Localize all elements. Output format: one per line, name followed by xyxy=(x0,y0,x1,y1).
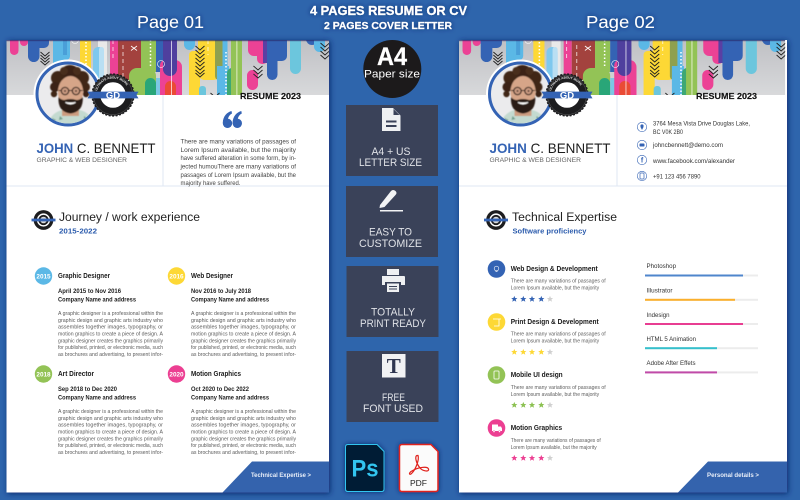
logo badge xyxy=(542,73,592,117)
job: motion graphics 2020: graphic design and graphic arts industry who xyxy=(191,416,296,422)
job: web designer 2016: as brochures and advertising, to present infor- xyxy=(191,352,296,358)
footer tab: next page: Technical Expertise > xyxy=(251,473,311,479)
feature: free font used: FREE xyxy=(382,392,405,404)
contact: facebook xyxy=(637,155,735,165)
job: web designer 2016: Nov 2016 to July 2018 xyxy=(191,288,251,295)
job: web designer 2016: A graphic designer is a professional within the xyxy=(191,311,296,317)
icon: photoshop xyxy=(346,444,384,492)
job: art director 2018: assembles together images, typography, or xyxy=(58,423,163,429)
feature: A4 + US letter size: A4 + US xyxy=(372,146,410,158)
job: graphic designer 2015: motion graphics to create a piece of design. A xyxy=(58,332,163,338)
job: art director 2018 xyxy=(35,365,163,456)
section date range: 2015-2022 xyxy=(59,226,97,236)
feature: easy to customize: CUSTOMIZE xyxy=(359,238,422,250)
bar: html 5 animation: HTML 5 Animation xyxy=(646,336,697,343)
skill: print design: Lorem Ipsum available, but the majority xyxy=(511,338,600,344)
skill: print design: Print Design & Development xyxy=(511,317,599,326)
summary paragraph: have suffered alteration in some form, by in- xyxy=(180,155,296,162)
job: graphic designer 2015: as brochures and advertising, to present infor- xyxy=(58,352,163,358)
contact list xyxy=(637,122,750,181)
job: art director 2018: Art Director xyxy=(58,369,94,378)
job: web designer 2016 xyxy=(168,267,296,358)
job: graphic designer 2015: Graphic Designer xyxy=(58,271,110,280)
title xyxy=(310,4,468,32)
logo badge: ULTIMATE ABOUT WORK xyxy=(549,76,582,90)
job: motion graphics 2020 xyxy=(168,365,296,456)
bar: after effects: Adobe After Effets xyxy=(646,360,696,367)
summary paragraph: There are many variations of passages of xyxy=(180,138,296,146)
job: graphic designer 2015: assembles together images, typography, or xyxy=(58,325,163,331)
panel: page 02 resume xyxy=(456,37,792,498)
contact: phone: +91 123 456 7890 xyxy=(653,174,701,180)
icon: printer xyxy=(382,269,405,292)
job: art director 2018: A graphic designer is a professional within the xyxy=(58,409,163,415)
feature: free font used xyxy=(346,351,438,422)
section heading: Technical Expertise xyxy=(512,212,617,224)
header dividers xyxy=(459,95,787,186)
icon: pencil xyxy=(380,190,403,212)
job: web designer 2016: Company Name and address xyxy=(191,296,269,304)
job: motion graphics 2020: 2020 xyxy=(169,371,184,378)
contact: facebook: f xyxy=(641,158,644,164)
skill: motion graphics: Lorem Ipsum available, but the majority xyxy=(511,445,597,451)
section subheading: Software proficiency xyxy=(512,226,587,236)
icon: pdf xyxy=(400,444,438,492)
icon: document xyxy=(382,108,400,131)
logo badge: GD xyxy=(106,90,120,102)
badge: A4 paper size: Paper size xyxy=(364,68,420,80)
title: 2 PAGES COVER LETTER xyxy=(324,20,452,32)
header dividers xyxy=(6,95,329,186)
summary paragraph xyxy=(180,138,297,187)
skill: mobile ui: Mobile UI design xyxy=(511,370,563,379)
job: motion graphics 2020: for published, printed, or electronic media, such xyxy=(191,443,296,449)
summary paragraph: Lorem Ipsum available, but the majority xyxy=(180,147,297,154)
footer tab: next page xyxy=(222,462,329,492)
job: graphic designer 2015: April 2015 to Nov 2016 xyxy=(58,288,121,295)
name: JOHN C. BENNETT xyxy=(490,140,611,156)
feature: A4 + US letter size xyxy=(346,105,438,176)
icon: pdf: PDF xyxy=(410,478,427,488)
job: web designer 2016: graphic designer creates the graphics primarily xyxy=(191,338,296,344)
feature: easy to customize xyxy=(346,186,438,257)
job: graphic designer 2015: Company Name and address xyxy=(58,296,136,304)
skill: motion graphics xyxy=(488,419,601,461)
bar chart: software skills xyxy=(645,263,758,373)
job: motion graphics 2020: assembles together images, typography, or xyxy=(191,423,296,429)
job title: GRAPHIC & WEB DESIGNER xyxy=(490,157,581,164)
job: motion graphics 2020: motion graphics to create a piece of design. A xyxy=(191,430,296,436)
skill: mobile ui: There are many variations of passages of xyxy=(511,385,606,391)
resume label: RESUME 2023 xyxy=(696,91,757,101)
job: art director 2018: graphic designer creates the graphics primarily xyxy=(58,436,163,442)
job: web designer 2016: graphic design and graphic arts industry who xyxy=(191,318,296,324)
job: motion graphics 2020: Oct 2020 to Dec 2022 xyxy=(191,386,249,393)
job: motion graphics 2020: as brochures and advertising, to present infor- xyxy=(191,450,296,456)
contact: address xyxy=(637,122,750,136)
heading: page 02: Page 02 xyxy=(586,12,655,32)
feature: totally print ready: TOTALLY xyxy=(371,307,416,319)
job: graphic designer 2015 xyxy=(35,267,163,358)
job: motion graphics 2020: Company Name and address xyxy=(191,394,269,402)
skill: print design: There are many variations of passages of xyxy=(511,332,606,338)
icon: font T: T xyxy=(387,354,401,378)
job: art director 2018: Sep 2018 to Dec 2020 xyxy=(58,386,117,393)
section heading: Journey / work experience xyxy=(59,212,200,224)
badge: A4 paper size xyxy=(363,40,421,98)
skill: web design: Web Design & Development xyxy=(511,264,598,273)
title: 4 PAGES RESUME OR CV xyxy=(310,4,468,18)
skill: motion graphics: Motion Graphics xyxy=(511,423,562,432)
job: motion graphics 2020: A graphic designer is a professional within the xyxy=(191,409,296,415)
skill: mobile ui: Lorem Ipsum available, but the majority xyxy=(511,392,600,398)
summary paragraph: jected humouThere are many variations of xyxy=(180,164,296,170)
job: motion graphics 2020: graphic designer creates the graphics primarily xyxy=(191,436,296,442)
skill: web design xyxy=(488,260,606,302)
resume label: RESUME 2023 xyxy=(240,91,301,101)
bar: indesign: Indesign xyxy=(646,312,670,319)
job: web designer 2016: 2016 xyxy=(169,273,184,280)
skill: mobile ui xyxy=(488,366,606,408)
footer tab: next page xyxy=(678,462,787,492)
footer tab: next page: Personal details > xyxy=(707,473,759,479)
section logo xyxy=(32,210,55,230)
job: graphic designer 2015: A graphic designer is a professional within the xyxy=(58,311,163,317)
summary paragraph: passages of Lorem Ipsum available, but the xyxy=(180,172,296,179)
logo badge: GD xyxy=(560,90,574,102)
logo badge xyxy=(88,73,138,117)
job: art director 2018: 2018 xyxy=(36,371,51,378)
job: art director 2018: Company Name and address xyxy=(58,394,136,402)
job: web designer 2016: motion graphics to create a piece of design. A xyxy=(191,332,296,338)
badge: A4 paper size: A4 xyxy=(377,43,407,71)
logo badge: ULTIMATE ABOUT WORK xyxy=(95,76,128,90)
job: graphic designer 2015: 2015 xyxy=(36,273,51,280)
job: web designer 2016: assembles together images, typography, or xyxy=(191,325,296,331)
job: motion graphics 2020: Motion Graphics xyxy=(191,369,241,378)
panel: page 01 resume xyxy=(4,37,334,498)
feature: free font used: FONT USED xyxy=(363,403,423,415)
feature: A4 + US letter size: LETTER SIZE xyxy=(359,157,422,169)
skill: web design: There are many variations of passages of xyxy=(511,278,606,284)
icon: photoshop: Ps xyxy=(352,456,378,482)
icon: quotation mark xyxy=(223,111,242,128)
bar: illustrator: Illustrator xyxy=(646,288,672,294)
job: art director 2018: motion graphics to create a piece of design. A xyxy=(58,430,163,436)
job title: GRAPHIC & WEB DESIGNER xyxy=(36,157,127,164)
header banner xyxy=(6,40,329,95)
feature: easy to customize: EASY TO xyxy=(369,227,412,239)
contact: email: johncbennett@demo.com xyxy=(652,143,723,149)
feature: totally print ready xyxy=(346,266,438,337)
feature: totally print ready: PRINT READY xyxy=(360,318,427,330)
section logo xyxy=(484,210,508,230)
portrait photo xyxy=(34,60,102,128)
job: art director 2018: graphic design and graphic arts industry who xyxy=(58,416,163,422)
job: web designer 2016: for published, printed, or electronic media, such xyxy=(191,345,296,351)
skill: motion graphics: There are many variations of passages of xyxy=(511,438,601,444)
summary paragraph: majority have suffered. xyxy=(180,180,241,187)
skill: web design: Lorem Ipsum available, but the majority xyxy=(511,286,600,292)
skill: print design xyxy=(488,313,606,355)
job: graphic designer 2015: graphic design and graphic arts industry who xyxy=(58,318,163,324)
heading: page 01: Page 01 xyxy=(137,12,204,32)
header banner xyxy=(459,40,786,95)
job: art director 2018: for published, printed, or electronic media, such xyxy=(58,443,163,449)
job: graphic designer 2015: for published, printed, or electronic media, such xyxy=(58,345,163,351)
job: art director 2018: as brochures and advertising, to present infor- xyxy=(58,450,163,456)
job: graphic designer 2015: graphic designer creates the graphics primarily xyxy=(58,338,163,344)
contact: address: BC V0K 2B0 xyxy=(653,130,684,136)
name: JOHN C. BENNETT xyxy=(36,140,156,156)
job: web designer 2016: Web Designer xyxy=(191,271,233,280)
bar: photoshop: Photoshop xyxy=(646,263,677,270)
contact: address: 3764 Mesa Vista Drive Douglas Lake, xyxy=(653,122,750,128)
contact: facebook: www.facebook.com/alexander xyxy=(652,159,735,165)
portrait photo xyxy=(486,60,555,128)
